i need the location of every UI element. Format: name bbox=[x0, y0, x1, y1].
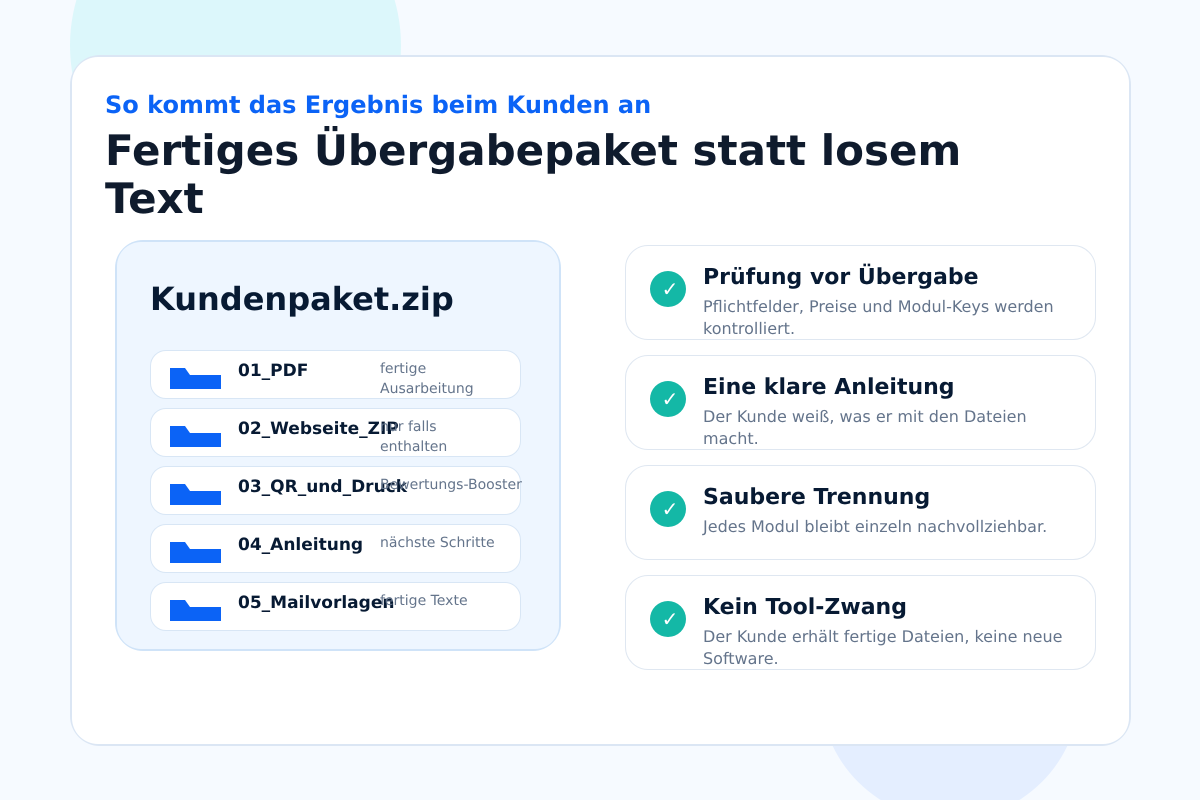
main card bbox=[70, 55, 1131, 746]
icon: check 1: ✓ bbox=[662, 277, 678, 301]
icon: check 4 bbox=[650, 601, 686, 637]
icon: folder 3 bbox=[170, 484, 221, 505]
icon: folder 4 bbox=[170, 542, 221, 563]
icon: check 1 bbox=[650, 271, 686, 307]
icon: check 3: ✓ bbox=[662, 497, 678, 521]
file row 3 bbox=[150, 466, 521, 515]
folder description 1: fertige Ausarbeitung bbox=[380, 361, 474, 397]
benefit card 4 bbox=[625, 575, 1096, 670]
benefit text 4: Der Kunde erhält fertige Dateien, keine neue Software. bbox=[703, 627, 1063, 668]
benefit card 2 bbox=[625, 355, 1096, 450]
eyebrow heading: So kommt das Ergebnis beim Kunden an bbox=[105, 91, 651, 119]
file row 5 bbox=[150, 582, 521, 631]
folder name 1: 01_PDF bbox=[238, 361, 308, 381]
icon: check 3 bbox=[650, 491, 686, 527]
folder description 2: nur falls enthalten bbox=[380, 419, 447, 455]
icon: check 4: ✓ bbox=[662, 607, 678, 631]
file row 4 bbox=[150, 524, 521, 573]
benefit heading 3: Saubere Trennung bbox=[703, 485, 930, 510]
folder description 4: nächste Schritte bbox=[380, 535, 495, 551]
folder name 3: 03_QR_und_Druck bbox=[238, 477, 407, 497]
benefit heading 4: Kein Tool-Zwang bbox=[703, 595, 907, 620]
folder description 3: Bewertungs-Booster bbox=[380, 477, 522, 493]
benefit card 1 bbox=[625, 245, 1096, 340]
benefit heading 2: Eine klare Anleitung bbox=[703, 375, 955, 400]
icon: folder 2 bbox=[170, 426, 221, 447]
file row 2 bbox=[150, 408, 521, 457]
folder name 2: 02_Webseite_ZIP bbox=[238, 419, 399, 439]
background circle: blue bbox=[833, 746, 1067, 800]
icon: folder 5 bbox=[170, 600, 221, 621]
benefit text 1: Pflichtfelder, Preise und Modul-Keys werden kontrolliert. bbox=[703, 297, 1054, 338]
benefit heading 1: Prüfung vor Übergabe bbox=[703, 265, 979, 290]
benefit card 3 bbox=[625, 465, 1096, 560]
icon: check 2 bbox=[650, 381, 686, 417]
folder name 5: 05_Mailvorlagen bbox=[238, 593, 394, 613]
title: Fertiges Übergabepaket statt losem Text bbox=[105, 126, 961, 223]
folder name 4: 04_Anleitung bbox=[238, 535, 363, 555]
file row 1 bbox=[150, 350, 521, 399]
folder description 5: fertige Texte bbox=[380, 593, 468, 609]
background circle: teal bbox=[70, 0, 401, 211]
benefit text 3: Jedes Modul bleibt einzeln nachvollziehbar. bbox=[703, 517, 1047, 536]
panel heading: Kundenpaket.zip bbox=[150, 280, 454, 318]
benefit text 2: Der Kunde weiß, was er mit den Dateien macht. bbox=[703, 407, 1027, 448]
icon: folder 1 bbox=[170, 368, 221, 389]
icon: check 2: ✓ bbox=[662, 387, 678, 411]
panel: Kundenpaket.zip bbox=[115, 240, 561, 651]
